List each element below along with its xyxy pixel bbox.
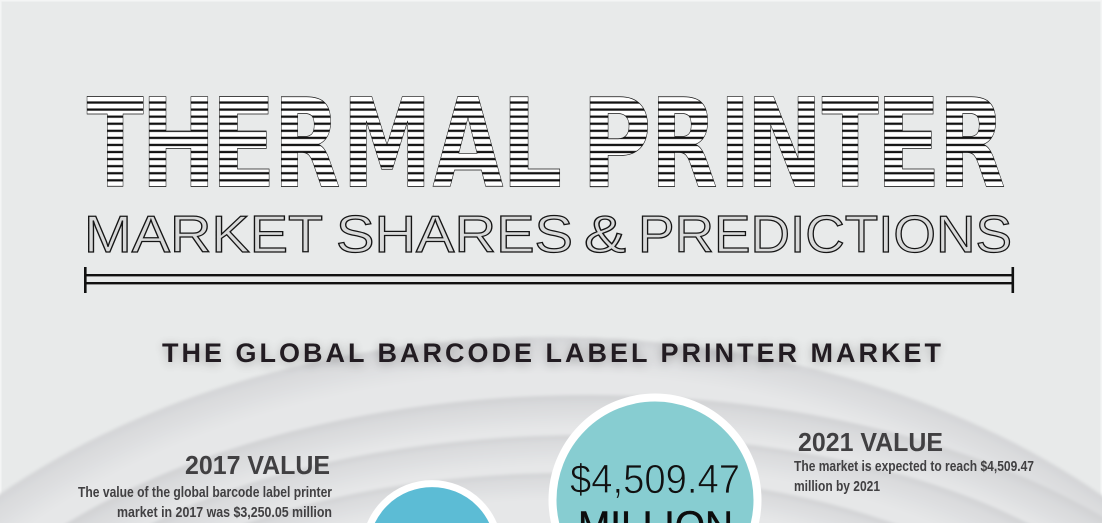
title: R: [273, 73, 340, 216]
title: E: [211, 74, 276, 217]
title: H: [141, 73, 216, 216]
title: P: [581, 74, 652, 217]
subtitle: [84, 206, 1012, 264]
title: E: [876, 74, 941, 217]
title: L: [501, 74, 562, 217]
concentric arc bands: [0, 337, 1102, 523]
subtitle: PREDICTIONS: [638, 206, 1012, 264]
title: M: [342, 73, 432, 216]
title: T: [822, 72, 879, 216]
title: [87, 72, 1005, 217]
text block: 2017 value: The value of the global barcode label printer: [78, 484, 332, 501]
title: N: [746, 72, 823, 216]
subtitle: &: [584, 206, 626, 264]
title: A: [432, 72, 503, 216]
subtitle: SHARES: [336, 206, 573, 264]
circle: 2021 value: $4,509.47: [570, 456, 740, 502]
circle: 2021 value: [552, 398, 758, 523]
title: T: [87, 72, 144, 216]
subtitle: MARKET: [84, 206, 323, 264]
text block: 2017 value: market in 2017 was $3,250.05 million: [117, 504, 332, 521]
text block: 2021 value: 2021 VALUE: [798, 427, 943, 457]
title: I: [720, 72, 751, 216]
section heading: THE GLOBAL BARCODE LABEL PRINTER MARKET: [162, 338, 942, 368]
title: R: [650, 73, 717, 216]
text block: 2017 value: [78, 450, 332, 521]
double rule with end ticks: [84, 267, 1014, 293]
text block: 2021 value: [794, 427, 1034, 495]
title: R: [938, 73, 1005, 216]
text block: 2021 value: The market is expected to reach $4,509.47: [794, 458, 1034, 475]
text block: 2017 value: 2017 VALUE: [185, 450, 330, 480]
circle: 2017 value: [365, 484, 499, 523]
text block: 2021 value: million by 2021: [794, 478, 880, 495]
